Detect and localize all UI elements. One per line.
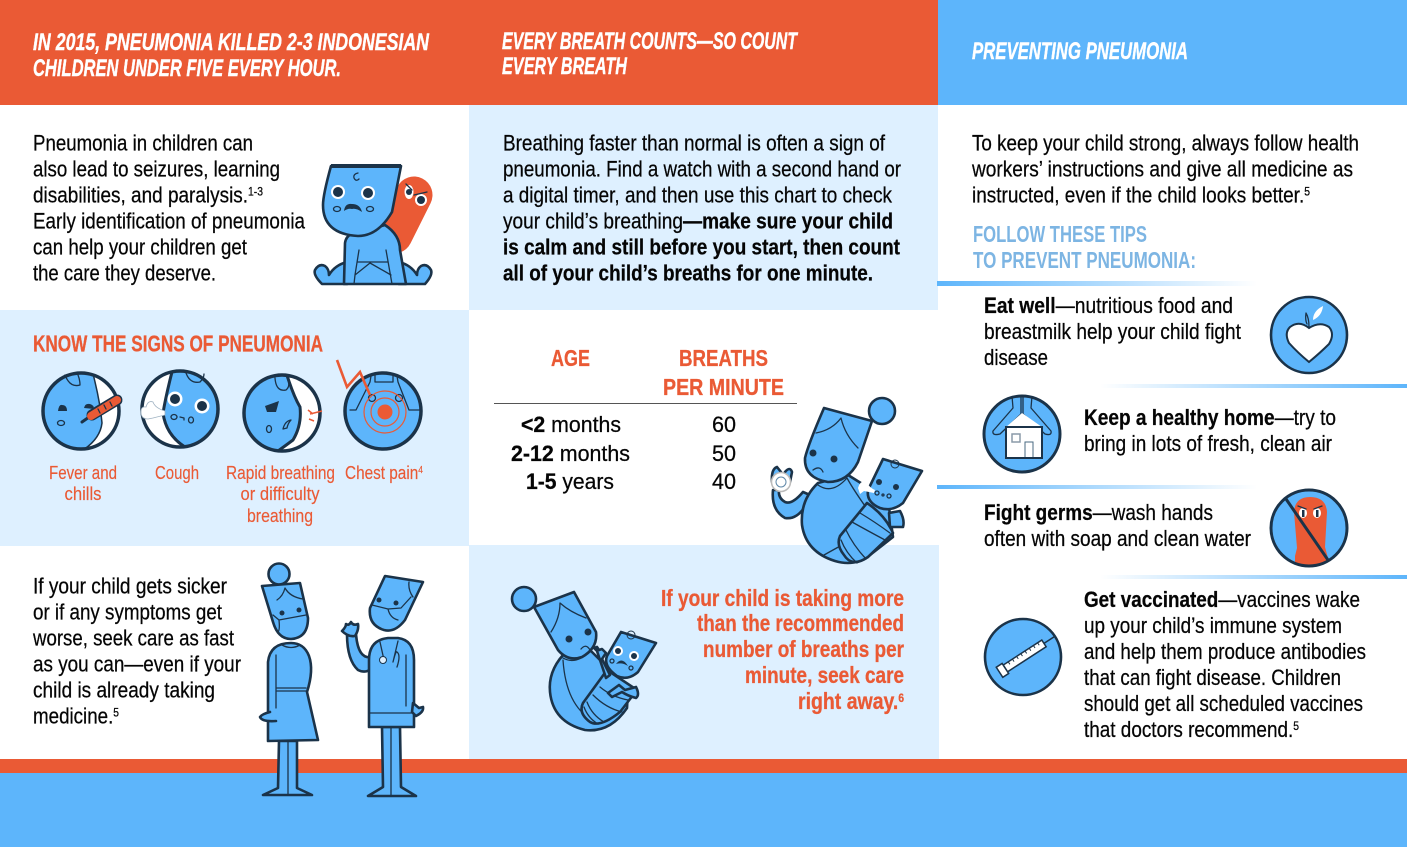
callout: seek care right away: minute, seek care [745, 662, 904, 688]
tip: eat well [984, 293, 1241, 370]
text block: counting instructions: is calm and still before you start, then count [503, 234, 901, 260]
label: chest pain: Chest pain [345, 463, 431, 483]
text block: seek care [32, 574, 241, 728]
text block: seek care: worse, seek care as fast [32, 626, 234, 650]
callout: seek care right away: number of breaths per [703, 636, 904, 662]
heading: pneumonia statistic [33, 29, 429, 82]
text block: complications: can help your children get [33, 234, 247, 260]
icon: fever and chills [41, 371, 122, 451]
heading: pneumonia statistic: CHILDREN UNDER FIVE EVERY HOUR. [33, 55, 341, 82]
tip: get vaccinated: that can fight disease. Children [1084, 665, 1341, 690]
table: breaths per minute by age [494, 345, 797, 494]
baby legs [315, 262, 347, 284]
label: fever and chills: chills [64, 484, 102, 504]
text block: counting instructions: pneumonia. Find a watch with a second hand or [503, 156, 901, 182]
text block: seek care: 5 [113, 706, 119, 720]
text block: counting instructions: a digital timer, and then use this chart to check [503, 182, 893, 208]
panel: seek care background [469, 545, 939, 759]
illustration: doctor with stethoscope [342, 576, 423, 796]
illustration: worried mother holding baby [512, 587, 656, 730]
illustration: health worker in dress [260, 564, 318, 795]
text block: prevention intro: workers’ instructions and give all medicine as [971, 156, 1353, 182]
callout: seek care right away [661, 585, 904, 714]
heading: every breath counts: EVERY BREATH [502, 53, 627, 80]
tip: fight germs [984, 500, 1251, 551]
callout: seek care right away: If your child is taking more [661, 585, 904, 611]
text block: complications: Pneumonia in children can [33, 130, 253, 156]
table: breaths per minute by age: 50 [712, 441, 736, 466]
baby head [868, 459, 922, 509]
footer blue band [0, 773, 1407, 847]
callout: seek care right away: right away. [798, 688, 916, 714]
heading: follow these tips: FOLLOW THESE TIPS [973, 221, 1147, 247]
heading: preventing pneumonia: PREVENTING PNEUMONIA [972, 38, 1188, 65]
footer orange stripe [0, 759, 1407, 773]
heading: know the signs: KNOW THE SIGNS OF PNEUMONIA [33, 330, 323, 356]
mother body [802, 475, 893, 563]
label: rapid breathing: breathing [247, 506, 313, 526]
label: fever and chills: Fever and [49, 463, 117, 483]
tip: fight germs: Fight germs—wash hands [984, 500, 1213, 525]
tip: get vaccinated: 5 [1293, 719, 1299, 733]
label: rapid breathing: Rapid breathing [226, 463, 335, 483]
tip: keep a healthy home: Keep a healthy home—try to [1084, 405, 1336, 430]
icon: cough [141, 368, 225, 447]
text block: complications: Early identification of pneumonia [33, 208, 306, 234]
icon: syringe [985, 619, 1061, 695]
panel: breathing instructions background [469, 105, 938, 310]
text block: counting instructions: Breathing faster than normal is often a sign of [503, 130, 886, 156]
table: breaths per minute by age: 60 [712, 412, 736, 437]
text block: complications: disabilities, and paralysis. [33, 182, 282, 208]
germ [394, 184, 427, 235]
table: breaths per minute by age: <2 months [521, 412, 621, 437]
text block: complications: the care they deserve. [33, 260, 216, 286]
tip: get vaccinated [1084, 587, 1366, 742]
text block: complications [33, 130, 306, 286]
illustration: mother timing baby breaths [772, 398, 922, 563]
text block: complications: also lead to seizures, learning [33, 156, 280, 182]
icon: house with hands [984, 396, 1060, 472]
table: breaths per minute by age: 1-5 years [526, 469, 614, 494]
text block: counting instructions [503, 130, 901, 286]
icon: no germs [1271, 490, 1347, 570]
tip: get vaccinated: should get all scheduled vaccines [1084, 691, 1363, 716]
text block: counting instructions: all of your child’s breaths for one minute. [503, 260, 873, 286]
tip: keep a healthy home: bring in lots of fresh, clean air [1084, 431, 1332, 456]
text block: prevention intro: 5 [1304, 184, 1310, 198]
baby body [344, 225, 406, 284]
text block: prevention intro [971, 130, 1359, 208]
label: rapid breathing [226, 463, 335, 526]
icon: sick baby with germ [315, 166, 431, 284]
icon: rapid breathing [235, 372, 322, 451]
heading: every breath counts: EVERY BREATH COUNTS—SO COUNT [502, 28, 799, 55]
text block: counting instructions: your child’s breathing—make sure your child [503, 208, 893, 234]
orange header band [0, 0, 938, 105]
baby head [323, 166, 401, 236]
icon: apple heart [1271, 297, 1347, 373]
text block: seek care: or if any symptoms get [33, 600, 222, 624]
text block: seek care: as you can—even if your [33, 652, 241, 676]
tip: get vaccinated: up your child’s immune system [1084, 613, 1342, 638]
label: fever and chills [49, 463, 117, 504]
tip: get vaccinated: Get vaccinated—vaccines wake [1084, 587, 1360, 612]
tip: get vaccinated: that doctors recommend. [1084, 717, 1327, 742]
table: breaths per minute by age: PER MINUTE [663, 374, 784, 400]
text block: seek care: If your child gets sicker [33, 574, 227, 598]
tip: eat well: disease [984, 345, 1048, 370]
tip: eat well: Eat well—nutritious food and [984, 293, 1233, 318]
panel: signs of pneumonia background [0, 310, 469, 546]
label: chest pain: 4 [418, 465, 423, 476]
label: cough: Cough [155, 463, 199, 483]
table: breaths per minute by age: 40 [712, 469, 736, 494]
table: breaths per minute by age: 2-12 months [511, 441, 630, 466]
heading: follow these tips: TO PREVENT PNEUMONIA: [973, 247, 1196, 273]
icon: chest pain [337, 360, 421, 449]
table: breaths per minute by age: AGE [551, 345, 590, 371]
tip: keep a healthy home [1084, 405, 1336, 456]
tip: fight germs: often with soap and clean water [984, 526, 1251, 551]
text block: seek care: child is already taking [33, 678, 215, 702]
tip: eat well: breastmilk help your child fight [984, 319, 1241, 344]
heading: every breath counts [502, 28, 799, 80]
blue header band [938, 0, 1407, 105]
text block: seek care: medicine. [33, 704, 127, 728]
label: rapid breathing: or difficulty [240, 484, 320, 504]
text block: complications: 1-3 [248, 184, 263, 198]
text block: prevention intro: instructed, even if the child looks better. [972, 182, 1357, 208]
tip: get vaccinated: and help them produce antibodies [1084, 639, 1366, 664]
callout: seek care right away: 6 [898, 691, 904, 705]
table: breaths per minute by age: BREATHS [679, 345, 768, 371]
mother head [805, 408, 872, 482]
heading: pneumonia statistic: IN 2015, PNEUMONIA KILLED 2-3 INDONESIAN [33, 29, 429, 56]
callout: seek care right away: than the recommended [697, 610, 904, 636]
heading: follow these tips [973, 221, 1196, 273]
